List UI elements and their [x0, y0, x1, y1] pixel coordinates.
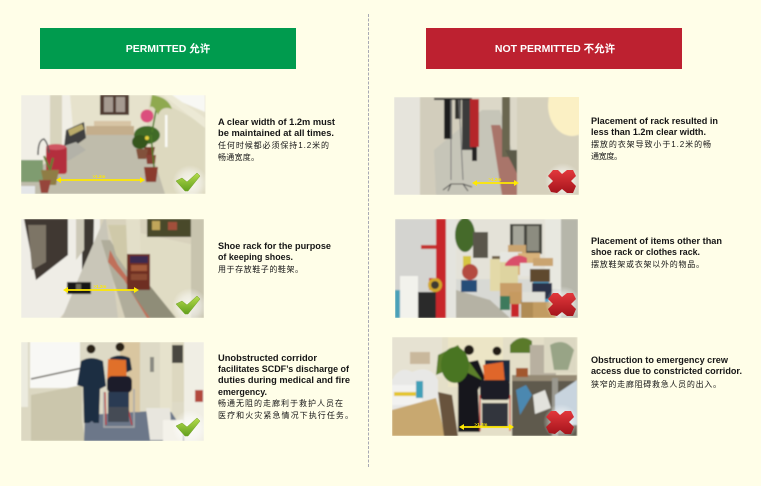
photo: corridor with shoe rack: [21, 219, 208, 324]
dimension arrow: >1.2m: [93, 174, 105, 179]
photo: obstruction to emergency crew: [392, 337, 579, 440]
text: rack placement: less than 1.2m clear width.: [591, 127, 706, 137]
photo: clear corridor with potted plants: [21, 95, 208, 201]
text: clear width: [218, 117, 335, 162]
text: other items: [591, 236, 722, 269]
dimension arrow: [63, 285, 139, 293]
photo: emergency crew in clear corridor: [21, 342, 208, 446]
text: obstruction: [591, 355, 742, 389]
text: other items: Placement of items other than: [591, 236, 722, 246]
text: clear width: A clear width of 1.2m must: [218, 117, 335, 127]
heading: not permitted: NOT PERMITTED 不允许: [495, 42, 616, 55]
icon: green tick: [174, 290, 204, 318]
text: unobstructed corridor: facilitates SCDF’s discharge of: [218, 364, 350, 374]
text: obstruction: Obstruction to emergency crew: [591, 355, 729, 365]
photo: clothes rack narrowing corridor: [394, 97, 579, 195]
dimension arrow: [472, 178, 519, 186]
text: unobstructed corridor: 医疗和火灾紧急情况下执行任务。: [218, 410, 353, 420]
icon: red cross: [544, 406, 577, 436]
icon: green tick: [174, 167, 206, 194]
text: unobstructed corridor: duties during medical and fire: [218, 375, 350, 385]
text: shoe rack: 用于存放鞋子的鞋架。: [218, 264, 303, 274]
text: clear width: be maintained at all times.: [218, 128, 334, 138]
icon: red cross: [546, 288, 578, 318]
dimension arrow: [56, 175, 145, 183]
text: unobstructed corridor: [218, 353, 353, 420]
centre divider: [368, 14, 370, 468]
heading: not permitted: [426, 28, 682, 69]
text: unobstructed corridor: 畅通无阻的走廊利于救护人员在: [218, 398, 343, 408]
heading: permitted: PERMITTED 允许: [126, 42, 211, 55]
text: shoe rack: of keeping shoes.: [218, 252, 293, 262]
icon: green tick: [176, 414, 203, 441]
text: obstruction: 狭窄的走廊阻碍救急人员的出入。: [591, 379, 721, 389]
text: obstruction: access due to constricted corridor.: [591, 366, 742, 376]
dimension arrow: >1.2m: [94, 284, 106, 289]
text: unobstructed corridor: Unobstructed corridor: [218, 353, 318, 363]
dimension arrow: >1.2m: [475, 422, 487, 427]
dimension arrow: >1.2m: [489, 177, 501, 182]
text: clear width: 任何时候都必须保持1.2米的: [218, 140, 329, 150]
icon: red cross: [547, 165, 578, 195]
heading: permitted: [40, 28, 296, 69]
text: shoe rack: Shoe rack for the purpose: [218, 241, 331, 251]
photo: items stored in corridor: [395, 218, 581, 322]
text: rack placement: [591, 116, 718, 161]
text: other items: 摆放鞋架或衣架以外的物品。: [591, 259, 704, 269]
text: shoe rack: [218, 241, 331, 274]
text: rack placement: 摆放的衣架导致小于1.2米的畅: [591, 139, 711, 149]
dimension arrow: [459, 423, 514, 430]
text: rack placement: Placement of rack resulted in: [591, 116, 718, 126]
text: unobstructed corridor: emergency.: [218, 387, 267, 397]
text: other items: shoe rack or clothes rack.: [591, 247, 700, 257]
text: clear width: 畅通宽度。: [218, 152, 259, 162]
text: rack placement: 通宽度。: [591, 151, 622, 161]
